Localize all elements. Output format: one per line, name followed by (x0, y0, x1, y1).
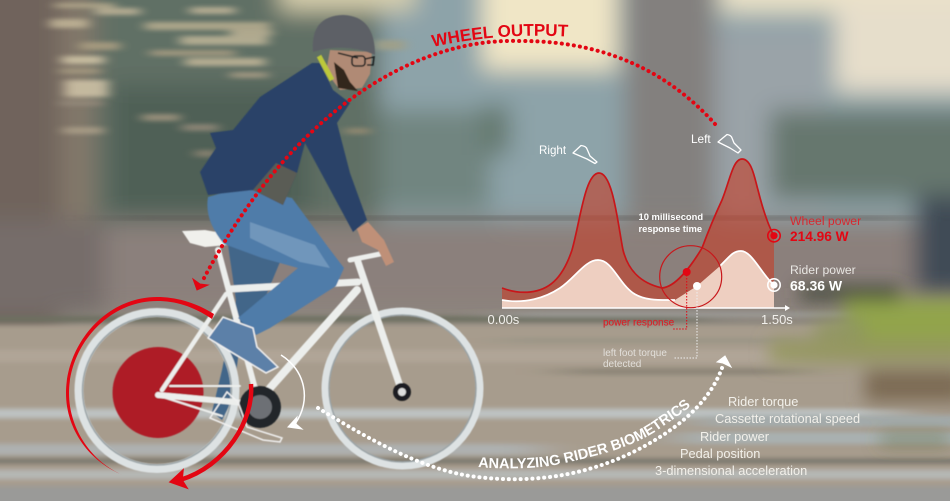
head (326, 50, 372, 90)
label: left foot torque: detected (603, 359, 641, 370)
bike frame (158, 250, 402, 416)
rider power end marker (768, 279, 780, 291)
list: biometric measures (655, 394, 860, 478)
rider power line (502, 251, 774, 301)
list: biometric measures: Rider power (700, 429, 770, 444)
label: left foot torque (603, 348, 667, 370)
label: wheel power (790, 214, 861, 244)
cyclist (79, 15, 480, 468)
helmet (313, 15, 375, 55)
leader: left foot torque (673, 286, 697, 358)
rotation arrow: rear wheel top arc (66, 297, 214, 475)
wheel power line (502, 159, 774, 292)
dotted red arc: wheel output (193, 41, 715, 290)
list: biometric measures: Cassette rotational speed (715, 411, 860, 426)
heading: wheel output: WHEEL OUTPUT (430, 24, 568, 46)
rear wheel (79, 312, 235, 468)
label: left foot: Left (691, 132, 711, 146)
label: response time: 10 millisecond (638, 211, 703, 222)
label: response time: response time (638, 223, 702, 234)
axis label: end: 1.50s (761, 312, 793, 327)
glasses (338, 53, 374, 66)
crank and hub (239, 386, 281, 428)
sweater (200, 63, 367, 232)
label: response time (638, 211, 703, 234)
red marker (683, 268, 691, 276)
front wheel (326, 312, 480, 466)
pedal foot outline (210, 392, 282, 442)
label: wheel power: 214.96 W (790, 229, 849, 244)
axis label: start: 0.00s (488, 312, 520, 327)
white pedal rotation arrow (281, 355, 304, 429)
time axis (502, 305, 790, 311)
wheel power area (502, 159, 774, 308)
dotted white arc: rider biometrics (318, 356, 731, 479)
label: rider power (790, 263, 856, 294)
leader: power response (673, 272, 687, 329)
label: left foot torque: left foot torque (603, 348, 667, 359)
wheel power end marker (768, 230, 780, 242)
heading: analyzing rider biometrics: ANALYZING RIDER BIOMETRICS (478, 400, 690, 468)
label: rider power: Rider power (790, 263, 856, 277)
icon: right foot (573, 146, 597, 164)
label: right foot: Right (539, 144, 567, 157)
list: biometric measures: Pedal position (680, 446, 760, 461)
rotation arrow: lower red arrow (170, 384, 251, 488)
list: biometric measures: Rider torque (728, 394, 798, 409)
icon: left foot (718, 134, 741, 153)
label: wheel power: Wheel power (790, 214, 861, 228)
list: biometric measures: 3-dimensional acceleration (655, 463, 807, 478)
label: power response: power response (603, 318, 675, 328)
rear leg (212, 245, 280, 420)
power chart (502, 159, 790, 358)
helmet strap (319, 56, 332, 80)
shoe (208, 317, 278, 373)
white marker (693, 282, 701, 290)
rider power area (502, 251, 774, 308)
saddle (182, 230, 250, 247)
red hub disc (112, 347, 204, 438)
jeans (207, 188, 344, 335)
response circle (660, 246, 722, 308)
label: rider power: 68.36 W (790, 278, 843, 294)
hand (357, 222, 394, 266)
wall top edge (110, 216, 910, 220)
